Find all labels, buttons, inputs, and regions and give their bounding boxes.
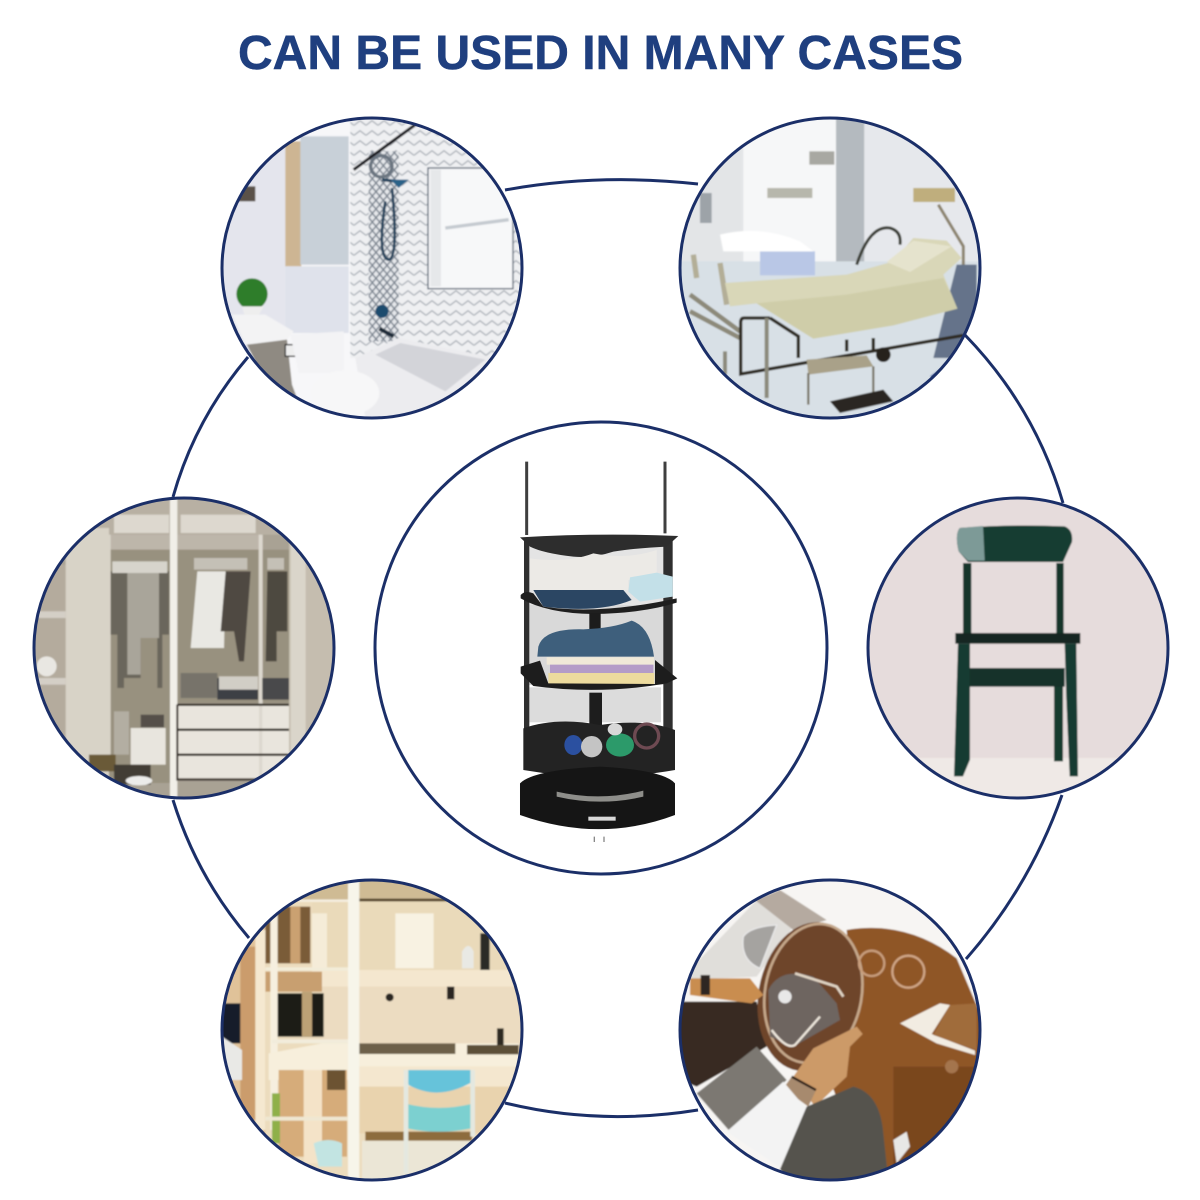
connecting arcs between photos bbox=[173, 180, 1063, 1117]
photo border: study shelves bbox=[222, 880, 522, 1180]
photo border: car interior bbox=[680, 880, 980, 1180]
photo border: hospital bed bbox=[680, 118, 980, 418]
folded stack bbox=[537, 621, 654, 657]
mesh side panels bbox=[529, 547, 664, 722]
photo border: wardrobe bbox=[34, 498, 334, 798]
bottom box bbox=[520, 767, 675, 829]
side posts bbox=[524, 538, 673, 730]
product: hanging shelf organizer bbox=[520, 462, 678, 842]
title: CAN BE USED IN MANY CASES bbox=[238, 27, 963, 80]
photo: green chair bbox=[868, 498, 1168, 798]
photo: bathroom bbox=[222, 118, 522, 418]
chair back bbox=[957, 525, 1072, 562]
shelf three bbox=[521, 660, 677, 690]
photo: wardrobe bbox=[34, 498, 334, 798]
photo: study shelves bbox=[222, 880, 522, 1180]
central panel bbox=[375, 422, 827, 874]
photo: hospital bed bbox=[680, 118, 980, 418]
shelf two bbox=[521, 592, 677, 614]
hanging straps bbox=[527, 462, 665, 535]
chair frame bbox=[963, 563, 1064, 633]
top shelf bbox=[520, 535, 678, 557]
photo border: bathroom bbox=[222, 118, 522, 418]
photo: car interior bbox=[680, 880, 980, 1180]
photo border: green chair bbox=[868, 498, 1168, 798]
lower pocket bbox=[523, 722, 675, 777]
upper clothes bbox=[530, 550, 657, 590]
